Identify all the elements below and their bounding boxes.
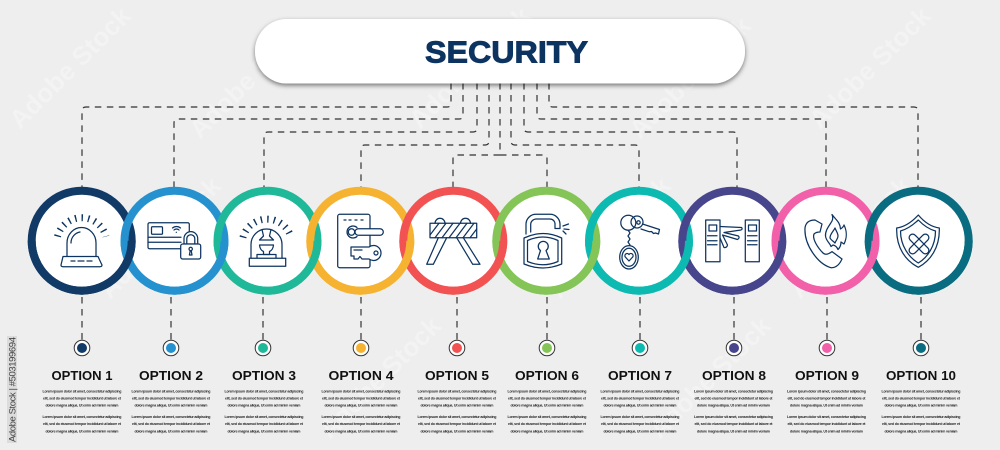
option 5: OPTION 5: [425, 368, 489, 383]
option 5: dolore magna aliqua. Ut enim ad minim veniam: [420, 429, 494, 433]
icon: open padlock: [524, 214, 569, 268]
option 4: dolore magna aliqua. Ut enim ad minim veniam: [324, 429, 398, 433]
icon: key with heart keychain: [620, 215, 660, 269]
icon: phone with flame: [805, 214, 846, 268]
option 2: dolore magna aliqua. Ut enim ad minim veniam: [134, 404, 208, 408]
option 10: OPTION 10: [886, 368, 956, 383]
option 10: [882, 340, 961, 433]
option 9: elit, sed do eiusmod tempor incididunt ut labore et: [788, 396, 866, 400]
option 5: [418, 340, 497, 433]
option 7: dolore magna aliqua. Ut enim ad minim veniam: [604, 404, 676, 408]
icon: shield with cross: [897, 215, 939, 267]
option 1: [42, 340, 122, 433]
option 5: Lorem ipsum dolor sit amet, consectetur adipiscing: [418, 415, 496, 419]
option 1: Lorem ipsum dolor sit amet, consectetur adipiscing: [42, 390, 122, 394]
option 1: OPTION 1: [52, 368, 112, 383]
text: Adobe Stock: [543, 170, 677, 304]
option 8: OPTION 8: [702, 368, 766, 383]
text: Adobe Stock: [183, 10, 317, 144]
option 3: OPTION 3: [232, 368, 296, 383]
option 10: elit, sed do eiusmod tempor incididunt ut labore et: [882, 422, 961, 426]
option 4: elit, sed do eiusmod tempor incididunt ut labore et: [322, 422, 401, 426]
option 2: dolore magna aliqua. Ut enim ad minim veniam: [134, 429, 208, 433]
option 8: dolore magna aliqua. Ut enim ad minim veniam: [697, 429, 770, 433]
option 6: OPTION 6: [515, 368, 579, 383]
option 9: elit, sed do eiusmod tempor incididunt ut labore et: [788, 422, 866, 426]
option 7: elit, sed do eiusmod tempor incididunt ut labore et: [601, 422, 680, 426]
option 5: elit, sed do eiusmod tempor incididunt ut labore et: [418, 396, 497, 400]
text: Adobe Stock: [803, 0, 937, 134]
option 10: Lorem ipsum dolor sit amet, consectetur adipiscing: [882, 390, 960, 394]
option 1: dolore magna aliqua. Ut enim ad minim veniam: [46, 429, 118, 433]
option 7: Lorem ipsum dolor sit amet, consectetur adipiscing: [600, 390, 680, 394]
option 2: [132, 340, 211, 433]
text: Adobe Stock: [643, 310, 777, 444]
option 1: elit, sed do eiusmod tempor incididunt ut labore et: [43, 422, 122, 426]
dashed connectors from circles to dots: [82, 297, 921, 340]
option 3: [224, 340, 304, 433]
option 4: [322, 340, 401, 433]
option 8: elit, sed do eiusmod tempor incididunt ut labore et: [694, 422, 773, 426]
white circle discs: [32, 191, 969, 291]
option 7: Lorem ipsum dolor sit amet, consectetur adipiscing: [600, 415, 680, 419]
option 3: Lorem ipsum dolor sit amet, consectetur adipiscing: [224, 390, 304, 394]
option 3: elit, sed do eiusmod tempor incididunt ut labore et: [225, 422, 304, 426]
option 9: dolore magna aliqua. Ut enim ad minim veniam: [790, 404, 863, 408]
option 7: OPTION 7: [608, 368, 672, 383]
stock id label: Adobe Stock | #503199694: [8, 337, 18, 442]
option 1: dolore magna aliqua. Ut enim ad minim veniam: [46, 404, 118, 408]
option 8: elit, sed do eiusmod tempor incididunt ut labore et: [694, 396, 773, 400]
option 4: elit, sed do eiusmod tempor incididunt ut labore et: [322, 396, 401, 400]
option 6: [508, 340, 587, 433]
option 2: elit, sed do eiusmod tempor incididunt ut labore et: [132, 396, 211, 400]
option 6: elit, sed do eiusmod tempor incididunt ut labore et: [508, 396, 587, 400]
option 9: OPTION 9: [795, 368, 859, 383]
dashed connectors from title to circles: [82, 83, 918, 187]
option 4: Lorem ipsum dolor sit amet, consectetur adipiscing: [322, 415, 400, 419]
option 4: OPTION 4: [328, 368, 394, 383]
text: Adobe Stock: [313, 310, 447, 444]
option 7: dolore magna aliqua. Ut enim ad minim veniam: [604, 429, 676, 433]
option 4: dolore magna aliqua. Ut enim ad minim veniam: [324, 404, 398, 408]
option 5: Lorem ipsum dolor sit amet, consectetur adipiscing: [418, 390, 496, 394]
icon: siren light: [58, 218, 106, 267]
icon: credit card with padlock: [148, 223, 201, 259]
text: Adobe Stock: [403, 0, 537, 134]
option 4: Lorem ipsum dolor sit amet, consectetur adipiscing: [322, 390, 400, 394]
option 9: dolore magna aliqua. Ut enim ad minim veniam: [790, 429, 863, 433]
option 2: elit, sed do eiusmod tempor incididunt ut labore et: [132, 422, 211, 426]
option 8: Lorem ipsum dolor sit amet, consectetur adipiscing: [694, 390, 773, 394]
option 2: OPTION 2: [139, 368, 203, 383]
option 3: elit, sed do eiusmod tempor incididunt ut labore et: [225, 396, 304, 400]
option 10: Lorem ipsum dolor sit amet, consectetur adipiscing: [882, 415, 960, 419]
option 6: elit, sed do eiusmod tempor incididunt ut labore et: [508, 422, 587, 426]
option 3: dolore magna aliqua. Ut enim ad minim veniam: [228, 429, 300, 433]
option 7: elit, sed do eiusmod tempor incididunt ut labore et: [601, 396, 680, 400]
icon: door handle and key: [338, 214, 383, 268]
option 10: dolore magna aliqua. Ut enim ad minim veniam: [884, 429, 958, 433]
option 3: Lorem ipsum dolor sit amet, consectetur adipiscing: [224, 415, 304, 419]
option 6: dolore magna aliqua. Ut enim ad minim veniam: [510, 429, 584, 433]
title: SECURITY: [425, 34, 588, 70]
option 10: elit, sed do eiusmod tempor incididunt ut labore et: [882, 396, 961, 400]
icon: siren with bulb: [243, 219, 291, 266]
option 9: Lorem ipsum dolor sit amet, consectetur adipiscing: [787, 415, 866, 419]
option 9: Lorem ipsum dolor sit amet, consectetur adipiscing: [787, 390, 866, 394]
option 5: dolore magna aliqua. Ut enim ad minim veniam: [420, 404, 494, 408]
interlocking coloured rings: [32, 191, 969, 291]
option 8: [694, 340, 773, 433]
option 7: [600, 340, 680, 433]
option 6: dolore magna aliqua. Ut enim ad minim veniam: [510, 404, 584, 408]
icon: turnstile gate: [706, 220, 759, 262]
title pill: [255, 19, 745, 84]
text: Adobe Stock: [623, 10, 757, 144]
option 2: Lorem ipsum dolor sit amet, consectetur adipiscing: [132, 415, 210, 419]
option 1: Lorem ipsum dolor sit amet, consectetur adipiscing: [42, 415, 122, 419]
option 2: Lorem ipsum dolor sit amet, consectetur adipiscing: [132, 390, 210, 394]
text: Adobe Stock: [3, 0, 137, 134]
option 8: dolore magna aliqua. Ut enim ad minim veniam: [697, 404, 770, 408]
option 3: dolore magna aliqua. Ut enim ad minim veniam: [228, 404, 300, 408]
option 6: Lorem ipsum dolor sit amet, consectetur adipiscing: [508, 390, 586, 394]
text: Adobe Stock: [783, 170, 917, 304]
icon: road barrier: [427, 218, 480, 264]
option 6: Lorem ipsum dolor sit amet, consectetur adipiscing: [508, 415, 586, 419]
option 1: elit, sed do eiusmod tempor incididunt ut labore et: [43, 396, 122, 400]
option 8: Lorem ipsum dolor sit amet, consectetur adipiscing: [694, 415, 773, 419]
text: Adobe Stock: [93, 170, 227, 304]
option 5: elit, sed do eiusmod tempor incididunt ut labore et: [418, 422, 497, 426]
option 9: [787, 340, 866, 433]
option 10: dolore magna aliqua. Ut enim ad minim veniam: [884, 404, 958, 408]
